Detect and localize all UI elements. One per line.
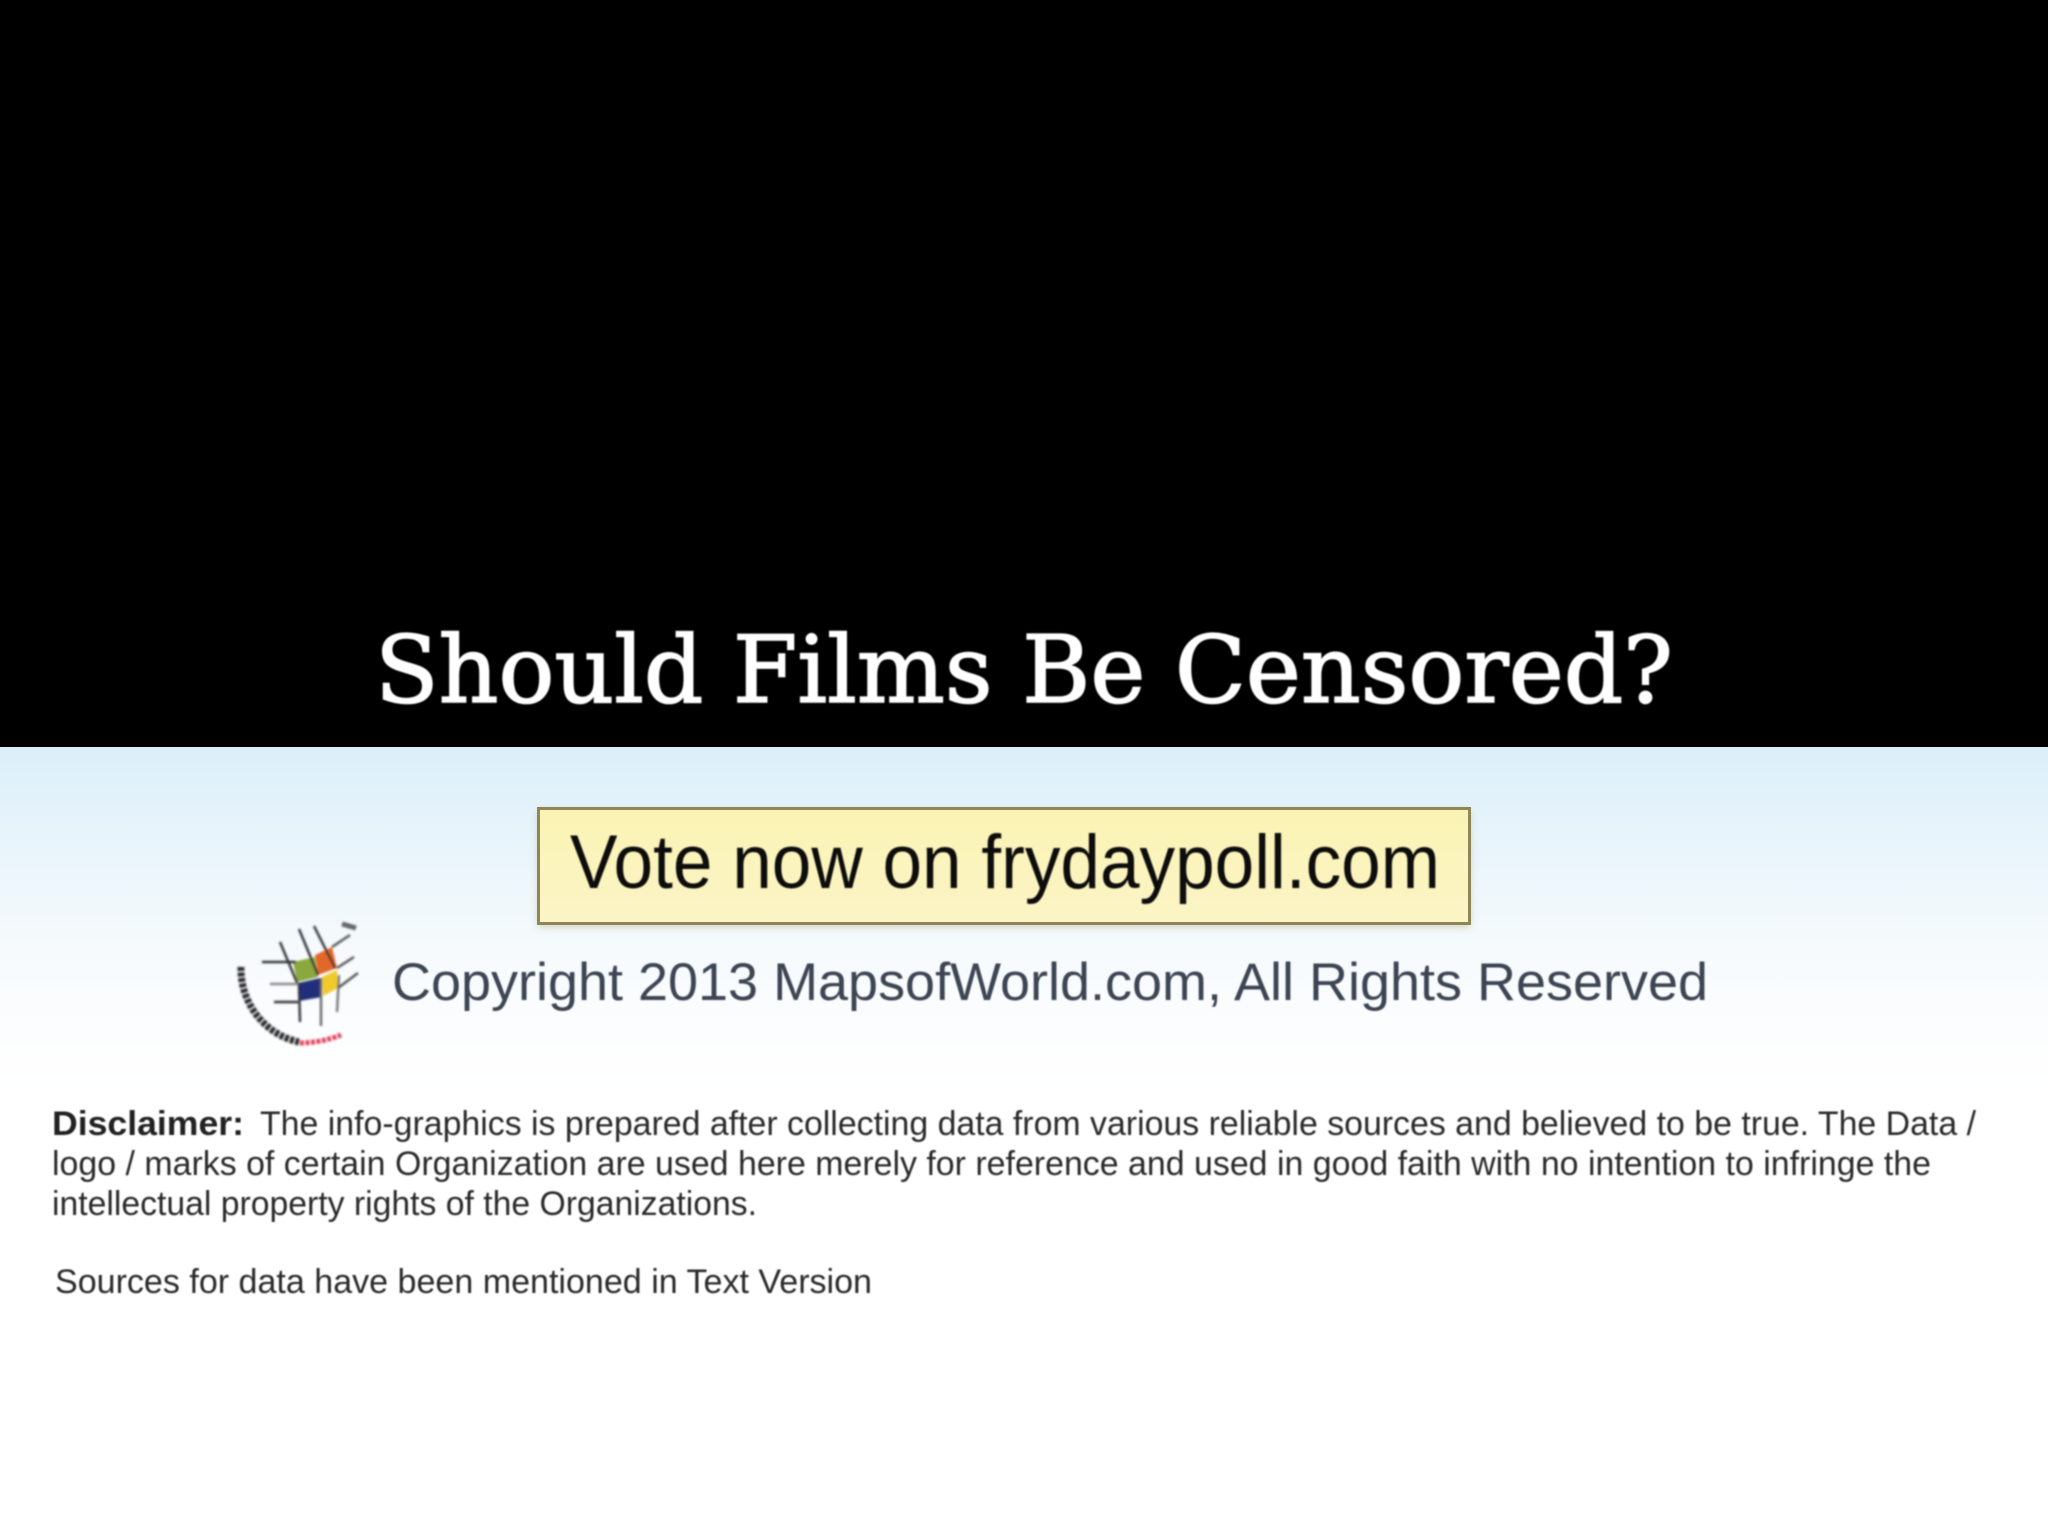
panel: black title band: [0, 0, 2048, 747]
disclaimer line 1: The info-graphics is prepared after collecting data from various reliable sources and believed to be true. The Data /: [260, 1105, 1977, 1143]
disclaimer label: Disclaimer:: [52, 1105, 244, 1143]
disclaimer line 3: intellectual property rights of the Organizations.: [52, 1185, 757, 1223]
callout: vote now box: Vote now on frydaypoll.com: [570, 820, 1440, 905]
icon: MapsofWorld logo: [241, 924, 358, 1043]
disclaimer line 2: logo / marks of certain Organization are used here merely for reference and used in good faith with no intention to infringe the: [52, 1145, 1931, 1183]
logo ring wordmark: [241, 967, 299, 1042]
sources note: Sources for data have been mentioned in Text Version: [55, 1263, 872, 1301]
disclaimer block: [52, 1105, 1977, 1223]
logo .com mark: [300, 1035, 341, 1043]
background: pale blue gradient band: [0, 746, 2048, 1086]
logo grid lines: [262, 926, 358, 1026]
callout: vote now box: [538, 808, 1470, 927]
logo trademark: [342, 924, 356, 928]
logo colour squares: [293, 947, 338, 1001]
copyright line: Copyright 2013 MapsofWorld.com, All Rights Reserved: [392, 953, 1708, 1012]
title: Should Films Be Censored?: [375, 616, 1673, 724]
